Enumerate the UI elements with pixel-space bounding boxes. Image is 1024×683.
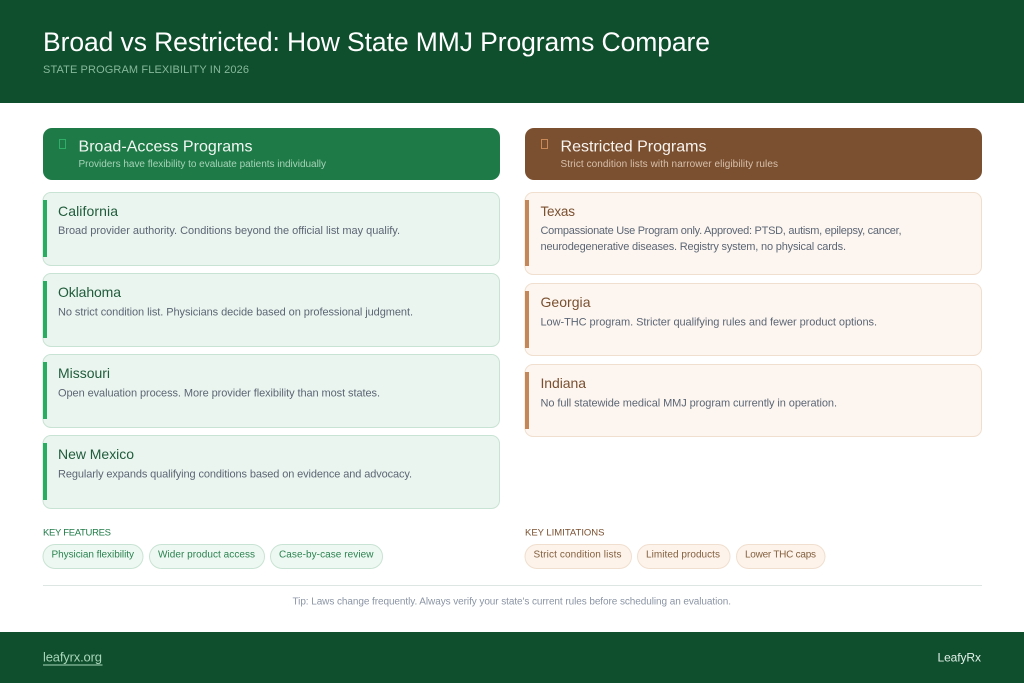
pills: key limitations: Lower THC caps [745, 550, 816, 560]
header band [0, 0, 1024, 103]
panel: restricted heading [525, 128, 982, 180]
card: Texas: Texas [540, 204, 575, 219]
text: restricted description: Strict condition lists with narrower eligibility rules [560, 159, 778, 170]
label: key limitations: KEY LIMITATIONS [525, 528, 604, 538]
card: California: Broad provider authority. Conditions beyond the official list may qualify. [58, 225, 400, 237]
card: California [43, 192, 500, 266]
card: Texas [525, 192, 982, 274]
card: Georgia: Low-THC program. Stricter qualifying rules and fewer product options. [540, 316, 877, 328]
card: Indiana: Indiana [540, 375, 586, 391]
card: Oklahoma: Oklahoma [58, 284, 121, 300]
pills: key limitations: Strict condition lists [534, 550, 622, 560]
title: Broad vs Restricted: How State MMJ Programs Compare [43, 27, 710, 57]
panel: broad-access heading [43, 128, 500, 180]
heading: broad-access: Broad-Access Programs [78, 138, 252, 156]
footer link: leafyrx.org [43, 650, 102, 664]
card: California: California [58, 203, 118, 219]
card: Indiana: No full statewide medical MMJ program currently in operation. [540, 398, 837, 410]
card: New Mexico: Regularly expands qualifying conditions based on evidence and advocacy. [58, 468, 412, 480]
card: Oklahoma: No strict condition list. Physicians decide based on professional judgment. [58, 306, 413, 318]
card: New Mexico: New Mexico [58, 446, 134, 462]
card: Georgia [525, 284, 982, 356]
pills: key features: Case-by-case review [279, 550, 374, 560]
card: Missouri: Missouri [58, 365, 110, 381]
heading: restricted: Restricted Programs [560, 138, 706, 156]
card: Missouri: Open evaluation process. More provider flexibility than most states. [58, 388, 380, 400]
icon: missing glyph box tan [542, 140, 548, 148]
tip text: Tip: Laws change frequently. Always verify your state's current rules before scheduling an evaluation. [292, 596, 731, 608]
pills: key limitations [525, 544, 825, 568]
footer band [0, 632, 1024, 683]
card: New Mexico [43, 436, 500, 508]
subtitle: STATE PROGRAM FLEXIBILITY IN 2026 [43, 64, 249, 76]
pills: key features [43, 544, 382, 568]
pills: key limitations: Limited products [646, 550, 720, 560]
card: Oklahoma [43, 274, 500, 346]
pills: key features: Physician flexibility [52, 550, 134, 560]
pills: key features: Wider product access [158, 550, 255, 560]
icon: missing glyph box green [60, 140, 66, 148]
card: Texas: Compassionate Use Program only. Approved: PTSD, autism, epilepsy, cancer, [540, 225, 902, 237]
card: Georgia: Georgia [540, 294, 591, 310]
label: key features: KEY FEATURES [43, 528, 111, 538]
card: Indiana [525, 364, 982, 436]
card: Texas: neurodegenerative diseases. Registry system, no physical cards. [540, 241, 846, 253]
footer brand: LeafyRx [938, 650, 981, 664]
text: broad-access description: Providers have flexibility to evaluate patients individually [78, 159, 326, 170]
card: Missouri [43, 354, 500, 428]
